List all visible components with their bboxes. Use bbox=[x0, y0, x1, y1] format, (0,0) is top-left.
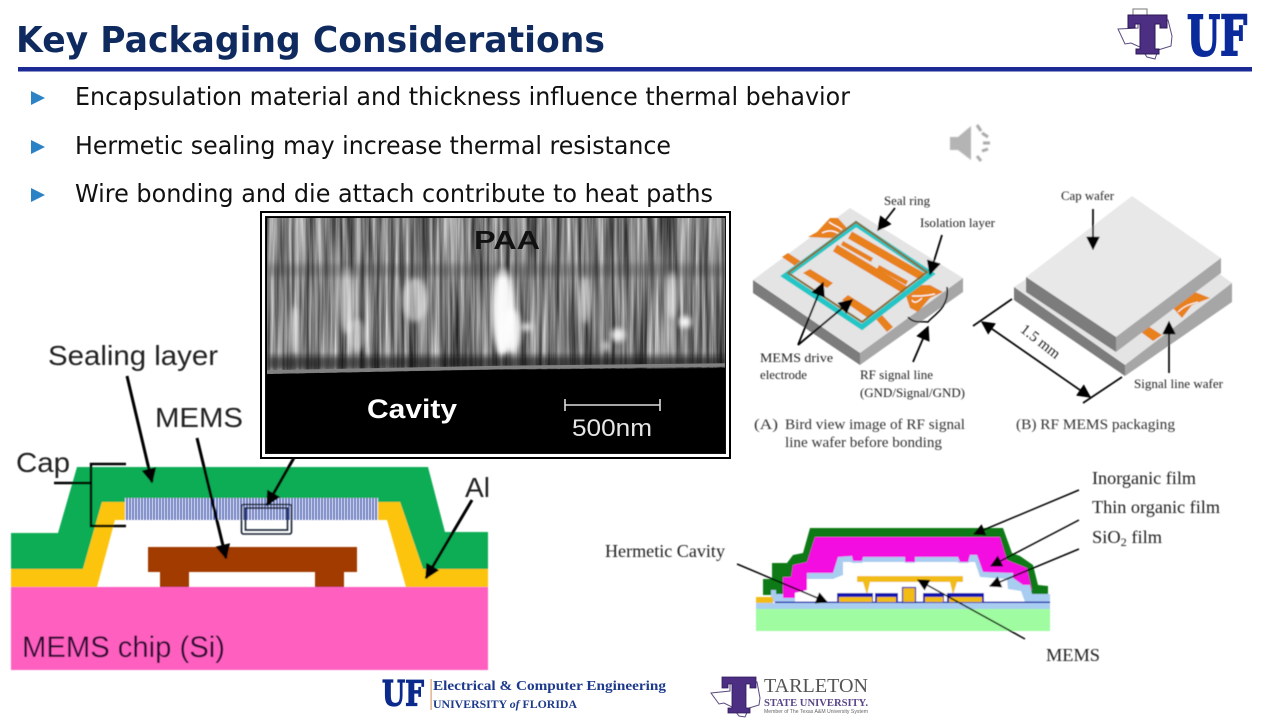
label: cavity: Cavity bbox=[367, 394, 457, 424]
university: UNIVERSITY of FLORIDA bbox=[433, 699, 578, 711]
header rule bbox=[18, 67, 1252, 72]
label: cap: Cap bbox=[16, 447, 70, 478]
silicon chip bbox=[11, 587, 488, 670]
title: Key Packaging Considerations bbox=[16, 20, 605, 61]
logo: Tarleton State University bbox=[711, 675, 868, 717]
signal line wafer bbox=[1014, 210, 1232, 365]
icon: speaker bbox=[950, 125, 990, 161]
arrow: MEMS bbox=[197, 438, 226, 558]
film labels: MEMS bbox=[1046, 645, 1100, 665]
long bands bbox=[835, 235, 923, 290]
base metal line bbox=[775, 602, 1050, 603]
system line: Member of The Texas A&M University System bbox=[764, 709, 868, 715]
diagram: PAA sealed MEMS cross-section bbox=[11, 340, 490, 670]
labels: electrode bbox=[760, 368, 807, 382]
department: Electrical & Computer Engineering bbox=[433, 679, 666, 694]
labels bbox=[760, 194, 996, 400]
film labels: Hermetic Cavity bbox=[605, 541, 725, 561]
pointer arrows bbox=[798, 208, 947, 362]
cap wafer bbox=[1026, 196, 1221, 337]
label: signal line wafer: Signal line wafer bbox=[1134, 377, 1224, 391]
caption A bbox=[754, 417, 965, 451]
leader arrows bbox=[737, 490, 1079, 639]
caption A: line wafer before bonding bbox=[785, 435, 942, 451]
dimension bbox=[973, 209, 1169, 403]
top fan bbox=[808, 218, 847, 238]
orange traces bbox=[782, 218, 943, 332]
cap bracket bbox=[54, 464, 126, 526]
label: 500nm: 500nm bbox=[572, 415, 652, 442]
MEMS beam bbox=[148, 547, 357, 587]
diagram B: RF MEMS packaging bbox=[973, 189, 1232, 433]
arrow: to SEM inset bbox=[267, 456, 295, 505]
divider bbox=[430, 679, 432, 710]
inset frame bbox=[261, 212, 730, 458]
drive electrodes bbox=[782, 253, 805, 268]
bullet 1: Encapsulation material and thickness influence thermal behavior bbox=[75, 82, 851, 111]
SiO2 film bbox=[771, 555, 1050, 603]
MEMS structure bbox=[837, 576, 984, 602]
caption B: (B) RF MEMS packaging bbox=[1016, 417, 1175, 433]
organic film bbox=[783, 537, 1032, 601]
labels: Isolation layer bbox=[920, 216, 996, 230]
film labels bbox=[605, 468, 1220, 665]
UF mark: UF bbox=[382, 674, 424, 714]
caption A: (A) bbox=[754, 417, 778, 433]
wordmark: TARLETON bbox=[764, 675, 868, 697]
arrow: sealing layer bbox=[127, 376, 152, 482]
logo: Tarleton T and UF, top right bbox=[1118, 3, 1247, 68]
label: MEMS chip: MEMS chip (Si) bbox=[22, 631, 225, 664]
label: MEMS: MEMS bbox=[155, 402, 243, 433]
logo: UF Electrical and Computer Engineering bbox=[382, 674, 666, 714]
exposed signal traces bbox=[1141, 326, 1162, 341]
film labels: 2 bbox=[1121, 535, 1127, 549]
bullet list bbox=[31, 82, 851, 208]
substrate bbox=[756, 609, 1050, 631]
labels: MEMS drive bbox=[760, 351, 834, 365]
label: PAA: PAA bbox=[474, 225, 540, 255]
icon: Texas T bbox=[711, 677, 760, 717]
labels: Seal ring bbox=[884, 194, 931, 208]
film labels: SiO bbox=[1092, 527, 1120, 547]
label: sealing layer: Sealing layer bbox=[48, 340, 218, 371]
scale bar bbox=[565, 399, 660, 411]
zoom box bbox=[242, 504, 292, 534]
seal ring bbox=[785, 222, 931, 327]
UF wordmark: UF bbox=[1187, 3, 1247, 68]
labels: RF signal line bbox=[860, 368, 933, 382]
bullet 2: Hermetic sealing may increase thermal resistance bbox=[75, 131, 671, 160]
diagram A: bird view of RF signal line wafer bbox=[753, 194, 996, 451]
diagram: hermetic cavity thin-film package bbox=[605, 468, 1220, 665]
film labels: Inorganic film bbox=[1092, 468, 1196, 488]
bullet 3: Wire bonding and die attach contribute to heat paths bbox=[75, 179, 713, 208]
state university: STATE UNIVERSITY. bbox=[764, 697, 868, 709]
icon: Texas outline with T bbox=[1118, 9, 1172, 59]
arrow: Al bbox=[426, 500, 472, 578]
label: Al: Al bbox=[465, 472, 490, 503]
aluminium layer bbox=[11, 502, 125, 587]
caption A: Bird view image of RF signal bbox=[785, 417, 965, 433]
porous anodic alumina stripes bbox=[125, 498, 378, 520]
wafer body bbox=[753, 208, 963, 353]
label: cap wafer: Cap wafer bbox=[1061, 189, 1115, 203]
film labels: film bbox=[1127, 527, 1162, 547]
right fan bbox=[905, 285, 943, 312]
cap green layer bbox=[11, 467, 488, 569]
film labels: Thin organic film bbox=[1092, 497, 1220, 517]
panel: SEM inset bbox=[261, 212, 730, 458]
SEM micrograph bbox=[267, 218, 725, 453]
hermetic cavity bbox=[795, 562, 1025, 602]
labels: (GND/Signal/GND) bbox=[860, 386, 965, 400]
label: 1.5 mm: 1.5 mm bbox=[1017, 322, 1063, 363]
inorganic film bbox=[763, 528, 1048, 601]
